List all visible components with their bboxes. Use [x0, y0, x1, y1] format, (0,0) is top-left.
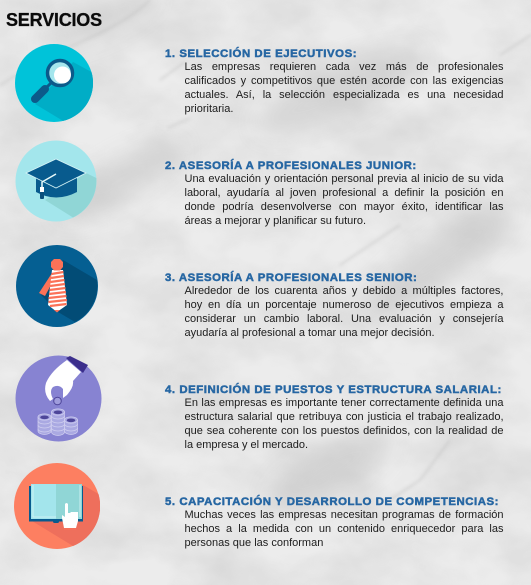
- title: SERVICIOS: [6, 10, 102, 30]
- text 4: [184, 397, 504, 451]
- heading 1: 1. SELECCIÓN DE EJECUTIVOS:: [165, 48, 357, 60]
- text 5: personas que las conforman: [184, 537, 323, 549]
- icon: necktie: [16, 245, 98, 327]
- icon: magnifying glass: [15, 44, 93, 122]
- text 3: ayudaría al profesional a tomar una mejor decisión.: [184, 327, 435, 339]
- section 4: [164, 382, 504, 451]
- text 1: calificados y competitivos que estén acorde con las exigencias: [184, 75, 504, 87]
- text 2: áreas a mejorar y planificar su futuro.: [184, 215, 366, 227]
- text 3: Alrededor de los cuarenta años y debido a múltiples factores,: [184, 285, 504, 297]
- heading 4: 4. DEFINICIÓN DE PUESTOS Y ESTRUCTURA SALARIAL:: [165, 384, 502, 396]
- text 1: Las empresas requieren cada vez más de profesionales: [184, 61, 504, 73]
- section 5: [165, 494, 504, 549]
- text 3: considerar un cambio laboral. Una evaluación y consejería: [184, 313, 504, 325]
- text 3: hoy en día un porcentaje numeroso de ejecutivos empieza a: [184, 299, 504, 311]
- section 2: [165, 158, 504, 227]
- text 2: Una evaluación y orientación personal previa al inicio de su vida: [184, 173, 504, 185]
- section 1: [165, 46, 504, 115]
- icon: graduation cap: [16, 140, 96, 222]
- icon: open book: [14, 463, 100, 549]
- coin stacks: [38, 409, 78, 436]
- text 4: la empresa y el mercado.: [184, 439, 308, 451]
- icon: hand and coins: [16, 356, 102, 442]
- text 5: [184, 509, 504, 549]
- text 2: laboral, ayudaría al joven profesional a definir la posición en: [184, 187, 504, 199]
- text 5: hechos a la medida con un contenido enriquecedor para las: [184, 523, 504, 535]
- text 4: En las empresas es importante tener correctamente definida una: [184, 397, 504, 409]
- heading 5: 5. CAPACITACIÓN Y DESARROLLO DE COMPETENCIAS:: [165, 496, 499, 508]
- text 1: [184, 61, 504, 115]
- text 5: Muchas veces las empresas necesitan programas de formación: [184, 509, 504, 521]
- section 3: [165, 270, 504, 339]
- text 2: [184, 173, 504, 227]
- text 2: donde podría desenvolverse con mayor éxito, identificar las: [184, 201, 504, 213]
- heading 3: 3. ASESORÍA A PROFESIONALES SENIOR:: [165, 272, 417, 284]
- text 3: [184, 285, 504, 339]
- text 4: que sea coherente con los puestos definidos, con la realidad de: [184, 425, 504, 437]
- text 1: prioritaria.: [184, 103, 233, 115]
- text 1: actuales. Así, la selección especializada es una necesidad: [184, 89, 504, 101]
- text 4: estructura salarial que retribuya con justicia el trabajo realizado,: [184, 411, 504, 423]
- heading 2: 2. ASESORÍA A PROFESIONALES JUNIOR:: [165, 160, 417, 172]
